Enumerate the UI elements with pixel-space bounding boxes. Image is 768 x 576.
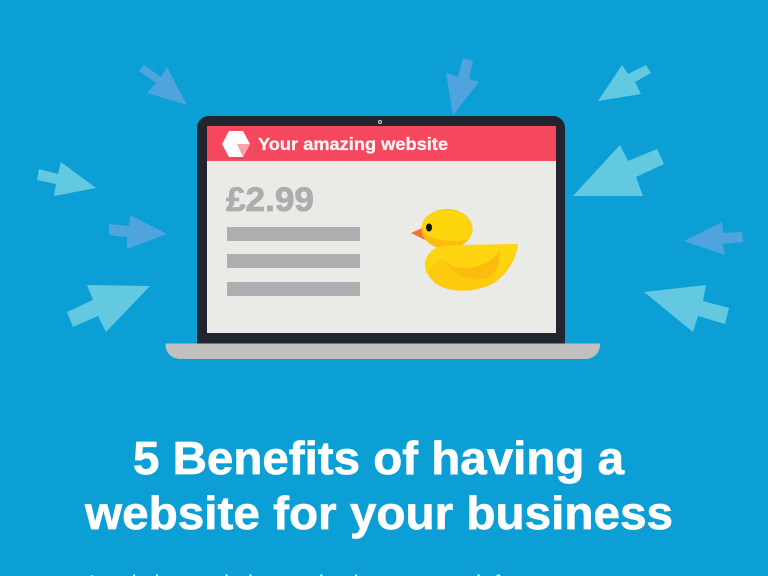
arrow: top right (598, 65, 651, 101)
icon: rubber duck (411, 209, 518, 291)
laptop screen (207, 126, 556, 333)
title (84, 432, 673, 539)
icon: hexagon logo (222, 131, 250, 157)
arrow: left middle (109, 215, 167, 249)
arrow: left lower (67, 285, 150, 332)
arrow: left upper (37, 162, 96, 196)
webcam (378, 120, 382, 124)
laptop bezel (197, 116, 565, 344)
arrow: right middle (684, 222, 743, 255)
laptop (166, 116, 600, 359)
product description lines (227, 227, 360, 296)
title: 5 Benefits of having a (133, 432, 624, 484)
arrow: top left (139, 65, 187, 105)
price: £2.99 (226, 181, 314, 219)
arrow: right upper (573, 145, 664, 196)
title: website for your business (84, 487, 673, 539)
website header bar (207, 126, 556, 161)
arrow: right lower (644, 285, 729, 332)
laptop base (166, 344, 600, 359)
arrow: top center (446, 58, 479, 115)
website name: Your amazing website (258, 134, 448, 154)
